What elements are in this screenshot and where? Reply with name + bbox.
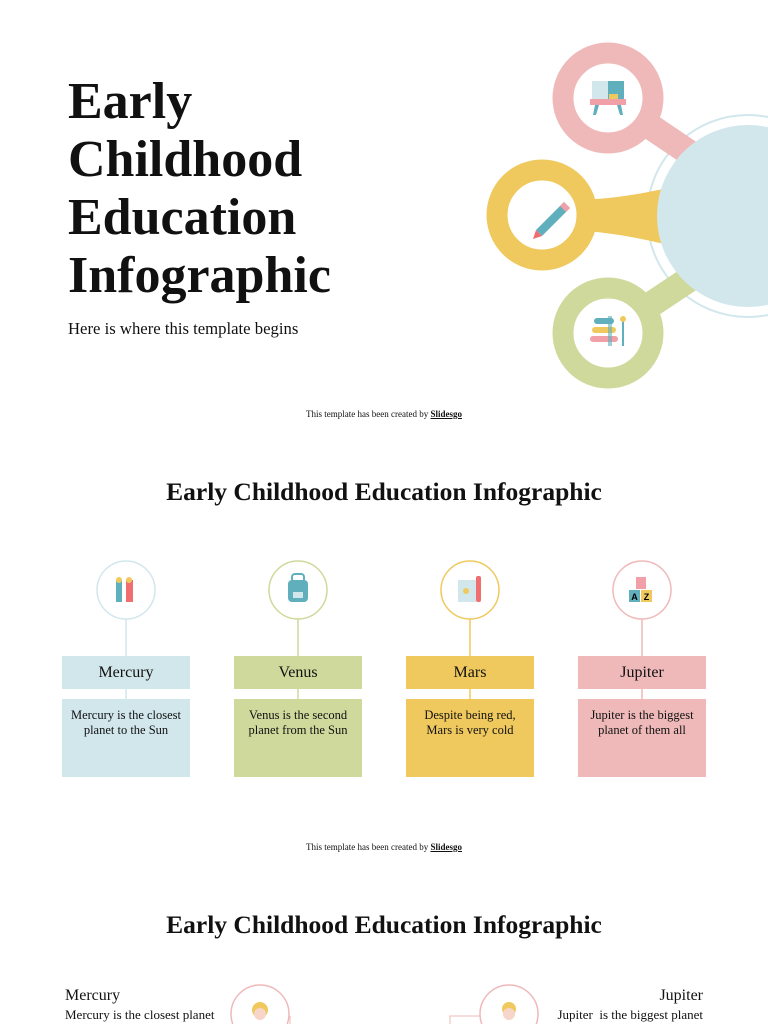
text: A bbox=[631, 592, 638, 602]
card: Venus bbox=[234, 560, 362, 777]
text: Jupiter bbox=[620, 664, 664, 681]
text: Venus is the second planet from the Sun bbox=[249, 708, 347, 737]
card: Jupiter bbox=[578, 560, 706, 777]
card: Mars bbox=[406, 560, 534, 777]
item: Mercury: Mercury bbox=[65, 987, 120, 1004]
text: Mercury is the closest bbox=[71, 708, 181, 722]
item: Mercury: Mercury is the closest planet bbox=[65, 1007, 214, 1022]
section title 2: Early Childhood Education Infographic bbox=[166, 477, 602, 506]
text: Despite being red, bbox=[424, 708, 516, 722]
text: Jupiter is the biggest planet of them all bbox=[590, 708, 694, 737]
section title 3: Early Childhood Education Infographic bbox=[166, 910, 602, 939]
icon: pencil bbox=[497, 170, 587, 260]
title bbox=[68, 73, 331, 304]
card: Mercury bbox=[62, 560, 190, 777]
title: Early bbox=[68, 73, 192, 130]
title: Infographic bbox=[68, 247, 331, 304]
icon: xylophone bbox=[563, 288, 653, 378]
text: Venus bbox=[278, 664, 318, 681]
icon: easel bbox=[563, 53, 653, 143]
subtitle: Here is where this template begins bbox=[68, 319, 298, 338]
title: Childhood bbox=[68, 131, 302, 188]
item: Mercury bbox=[65, 987, 214, 1022]
item: Jupiter: Jupiter bbox=[659, 987, 703, 1004]
item: Jupiter: Jupiter is the biggest planet bbox=[557, 1007, 703, 1022]
text: Mars is very cold bbox=[426, 723, 514, 737]
text: Mars bbox=[454, 664, 486, 681]
credit 1: This template has been created by Slidesgo bbox=[306, 409, 462, 419]
credit 2: This template has been created by Slidesgo bbox=[306, 842, 462, 852]
text: Mercury bbox=[98, 664, 154, 681]
item: Jupiter bbox=[557, 987, 703, 1022]
title: Education bbox=[68, 189, 296, 246]
icons bottom bbox=[230, 984, 539, 1024]
text: Z bbox=[644, 592, 650, 602]
text: planet to the Sun bbox=[84, 723, 168, 737]
hero graphic bbox=[486, 42, 768, 388]
